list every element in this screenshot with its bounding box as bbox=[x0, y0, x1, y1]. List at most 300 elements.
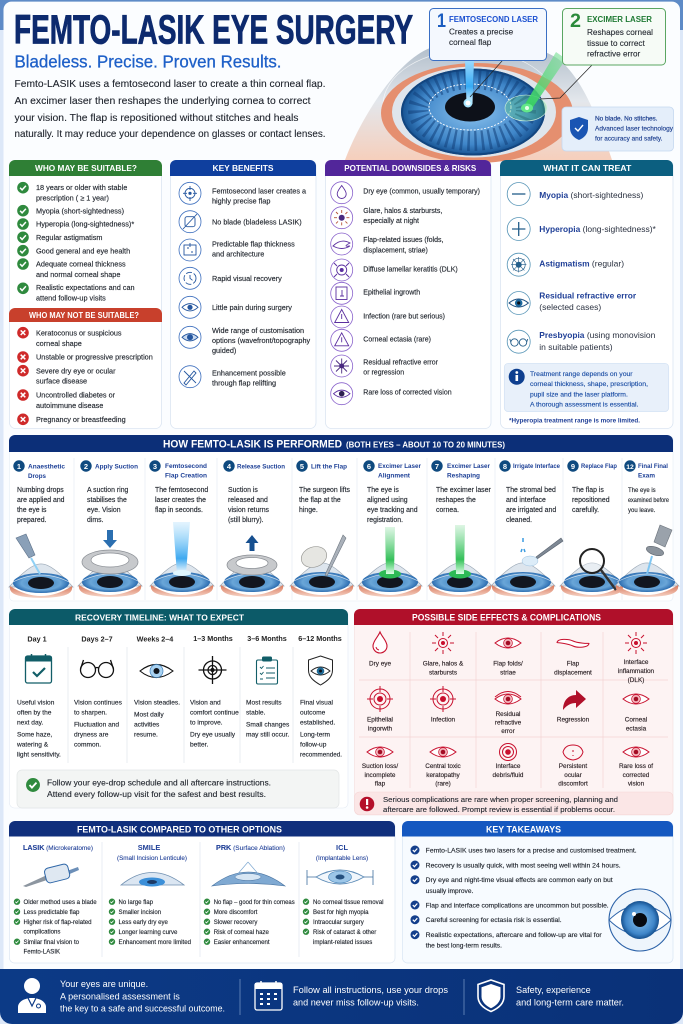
heading: WHAT IT CAN TREAT bbox=[543, 164, 631, 173]
effect: flap displacement: displacement bbox=[554, 670, 592, 676]
list: contraindications: Unstable or progressive prescription bbox=[36, 353, 153, 362]
step 4: release suction: Release Suction bbox=[237, 464, 285, 470]
heading: WHO MAY BE SUITABLE? bbox=[35, 164, 137, 173]
step 6: excimer alignment: eye tracking and bbox=[367, 507, 418, 514]
step 8: irrigate interface: The stromal bed bbox=[506, 487, 556, 494]
heading: FEMTO-LASIK COMPARED TO OTHER OPTIONS bbox=[77, 824, 282, 834]
step 4: release suction: 4 bbox=[227, 462, 232, 471]
icon: calendar bbox=[26, 654, 52, 683]
effect: persistent discomfort: ocular bbox=[564, 772, 583, 779]
risk: glare: especially at night bbox=[363, 218, 419, 225]
effect: interface debris bbox=[493, 744, 524, 779]
6-12 months: outcome bbox=[300, 710, 326, 716]
benefit: customisation: guided) bbox=[212, 346, 236, 355]
step 10: final exam: The eye is bbox=[628, 488, 656, 494]
step 6: excimer alignment: The eye is bbox=[367, 487, 399, 494]
1-3 months: Vision and bbox=[190, 700, 221, 706]
step 1: anaesthetic drops: prepared. bbox=[17, 517, 47, 524]
illustration: flap lift bbox=[290, 535, 354, 597]
1-3 months: Dry eye usually bbox=[190, 732, 236, 738]
days 2-7: Fluctuation and bbox=[74, 722, 119, 728]
risk: dry eye bbox=[331, 182, 480, 204]
effect: persistent discomfort: discomfort bbox=[558, 780, 588, 788]
list: suitability criteria: Good general and eye health bbox=[36, 246, 130, 255]
icon: calendar bbox=[255, 981, 282, 1010]
3-6 months: may still occur. bbox=[246, 732, 289, 738]
illustration: microkeratome bbox=[23, 863, 79, 887]
risk: residual error: Residual refractive error bbox=[363, 359, 439, 366]
3-6 months: stable. bbox=[246, 710, 266, 716]
step 3: femtosecond flap creation: 3 bbox=[153, 462, 157, 471]
subpanel header: who may not be suitable: WHO MAY NOT BE SUITABLE? bbox=[29, 311, 139, 320]
step 7: excimer reshaping: cornea. bbox=[436, 507, 459, 514]
illustration: ring lifted bbox=[220, 535, 284, 597]
treat: residual refractive error bbox=[507, 290, 637, 314]
list: suitability criteria: attend follow-up visits bbox=[36, 294, 106, 303]
benefit: precise flap: highly precise flap bbox=[212, 196, 270, 205]
callout: excimer laser: EXCIMER LASER bbox=[587, 15, 652, 24]
intro paragraph: Femto-LASIK uses a femtosecond laser to create a thin corneal flap. bbox=[14, 78, 326, 90]
risk: loss of vision bbox=[331, 383, 452, 405]
callout: no blade no stitches: for accuracy and safety. bbox=[595, 136, 663, 142]
footer message 3: Safety, experience bbox=[516, 985, 591, 995]
list: contraindications: Severe dry eye or ocular bbox=[36, 366, 116, 375]
step 2: apply suction: eye. Vision bbox=[87, 507, 121, 514]
step 7: excimer reshaping: reshapes the bbox=[436, 497, 476, 504]
option: SMILE: (Small Incision Lenticule) bbox=[117, 855, 187, 862]
subpanel header: who may not be suitable bbox=[9, 308, 162, 322]
risk: flap issues bbox=[331, 233, 443, 255]
heading: POTENTIAL DOWNSIDES & RISKS bbox=[344, 164, 477, 173]
benefit: no blade: No blade (bladeless LASIK) bbox=[212, 217, 302, 226]
step 4: release suction: (still blurry). bbox=[228, 517, 264, 524]
panel: compared to other options bbox=[9, 821, 395, 963]
option: ICL: implant-related issues bbox=[313, 939, 372, 946]
callout: serious complications: Serious complications are rare when proper screening, planning and bbox=[383, 795, 618, 804]
heading: KEY TAKEAWAYS bbox=[486, 824, 561, 834]
callout: aftercare: Follow your eye-drop schedule and all aftercare instructions. bbox=[47, 777, 271, 787]
step 1: anaesthetic drops: 1 bbox=[17, 462, 21, 471]
illustration: microscope bbox=[615, 525, 679, 597]
list: suitability criteria: Myopia (short-sightedness) bbox=[36, 206, 124, 215]
callout: excimer laser: 2 bbox=[570, 11, 581, 32]
days 2-7: to sharpen. bbox=[74, 710, 107, 716]
effect: corneal ectasia: ectasia bbox=[626, 726, 647, 732]
benefit: predictable flap: and architecture bbox=[212, 250, 264, 259]
icon: glasses bbox=[80, 660, 114, 678]
option: SMILE: SMILE bbox=[138, 843, 160, 852]
list: takeaways: Flap and interface complications are uncommon but possible. bbox=[426, 902, 609, 910]
effect: flap folds bbox=[493, 638, 523, 676]
illustration: eye bbox=[609, 889, 671, 951]
option: SMILE: Longer learning curve bbox=[118, 929, 178, 936]
step 7: excimer reshaping bbox=[428, 460, 492, 597]
info box: treatment range bbox=[504, 363, 669, 412]
step 1: anaesthetic drops: are applied and bbox=[17, 497, 65, 504]
step 5: lift the flap: Lift the Flap bbox=[311, 464, 347, 470]
effect: suction loss: Suction loss/ bbox=[362, 763, 398, 770]
panel: key benefits bbox=[170, 160, 316, 428]
effect: interface inflammation: (DLK) bbox=[628, 677, 644, 684]
benefit: customisation bbox=[179, 326, 311, 355]
illustration: blue laser bbox=[150, 522, 214, 597]
step 10: final exam bbox=[615, 460, 679, 597]
list: suitability criteria: prescription ( ≥ 1 year) bbox=[36, 193, 109, 202]
option: ICL: (Implantable Lens) bbox=[316, 855, 368, 862]
risk: residual error bbox=[331, 355, 439, 377]
intro paragraph bbox=[14, 78, 326, 140]
day 1: often by the bbox=[17, 710, 52, 716]
step 9: replace flap: carefully. bbox=[572, 507, 599, 514]
effect: suction loss: flap bbox=[375, 780, 386, 788]
option: PRK: Easier enhancement bbox=[214, 939, 270, 946]
step 4: release suction: Suction is bbox=[228, 487, 258, 494]
risk: DLK: Diffuse lamellar keratitis (DLK) bbox=[363, 267, 458, 274]
effect: flap folds: striae bbox=[500, 670, 516, 676]
step 5: lift the flap bbox=[290, 460, 354, 597]
option: ICL: Risk of cataract & other bbox=[313, 929, 376, 936]
treat: myopia bbox=[507, 182, 643, 206]
6-12 months: Long-term bbox=[300, 732, 331, 738]
effect: rare loss of vision: corrected bbox=[623, 772, 650, 779]
footer message 1: A personalised assessment is bbox=[60, 992, 180, 1002]
step 6: excimer alignment: registration. bbox=[367, 517, 403, 524]
step 3: femtosecond flap creation: laser creates the bbox=[155, 497, 206, 504]
3-6 months bbox=[246, 634, 290, 738]
option: PRK: More discomfort bbox=[214, 909, 258, 916]
effect: interface inflammation bbox=[618, 632, 655, 684]
panel: key takeaways bbox=[402, 821, 673, 963]
callout: excimer laser bbox=[562, 8, 666, 65]
callout: no blade no stitches: No blade. No stitches. bbox=[595, 116, 658, 122]
effect: glare bbox=[423, 632, 464, 676]
benefit: no blade bbox=[179, 211, 302, 233]
risk: flap issues: Flap-related issues (folds, bbox=[363, 237, 443, 244]
callout: femtosecond laser: 1 bbox=[437, 11, 446, 32]
callout: excimer laser: refractive error bbox=[587, 50, 641, 58]
step 4: release suction bbox=[220, 460, 285, 597]
panel: potential downsides and risks bbox=[325, 160, 491, 428]
step 8: irrigate interface: are irrigated and bbox=[506, 507, 556, 514]
option: ICL: Intraocular surgery bbox=[313, 919, 365, 926]
footer message 2: and never miss follow-up visits. bbox=[293, 998, 419, 1008]
benefit: enhancement: Enhancement possible bbox=[212, 369, 286, 378]
footer message 3 bbox=[516, 985, 624, 1008]
illustration: implantable lens bbox=[307, 870, 373, 885]
intro paragraph: naturally. It may reduce your dependence on glasses or contact lenses. bbox=[14, 128, 326, 140]
icon: doctor bbox=[18, 978, 46, 1013]
6-12 months: established. bbox=[300, 720, 335, 726]
list: suitability criteria: Hyperopia (long-sightedness)* bbox=[36, 220, 134, 229]
footer message 1 bbox=[60, 979, 225, 1014]
weeks 2-4: Vision steadies. bbox=[134, 700, 180, 706]
list: takeaways: Careful screening for ectasia risk is essential. bbox=[426, 917, 562, 924]
6-12 months: follow-up bbox=[300, 742, 327, 748]
callout: aftercare bbox=[17, 770, 339, 808]
step 6: excimer alignment: 6 bbox=[367, 462, 371, 471]
step 1: anaesthetic drops: the eye is bbox=[17, 507, 47, 514]
effect: epithelial ingrowth: ingorwth bbox=[368, 726, 393, 732]
callout: aftercare: Attend every follow-up visit for the safest and best results. bbox=[47, 789, 266, 799]
option: PRK: Risk of corneal haze bbox=[214, 929, 270, 936]
risk: epithelial ingrowth bbox=[331, 282, 420, 304]
illustration: eye drops bbox=[9, 534, 73, 598]
panel: how femto-lasik is performed bbox=[9, 435, 679, 601]
effect: dry eye bbox=[369, 632, 391, 668]
step 1: anaesthetic drops: Numbing drops bbox=[17, 487, 64, 494]
step 1: anaesthetic drops bbox=[9, 460, 73, 598]
icon: shield bbox=[478, 980, 504, 1012]
step 6: excimer alignment: aligned using bbox=[367, 497, 408, 504]
panel: who may be suitable bbox=[9, 160, 162, 428]
risk: DLK bbox=[331, 259, 458, 281]
option: PRK: No flap – good for thin corneas bbox=[214, 899, 295, 906]
option: SMILE bbox=[109, 843, 191, 946]
info box: treatment range: A thorough assessment is essential. bbox=[530, 401, 639, 408]
step 4: release suction: vision returns bbox=[228, 507, 270, 514]
list: contraindications: corneal shape bbox=[36, 339, 82, 348]
benefit: little pain bbox=[179, 296, 292, 318]
effect: flap displacement: Flap bbox=[567, 660, 580, 668]
risk: infection: Infection (rare but serious) bbox=[363, 313, 445, 320]
risk: ectasia: Corneal ectasia (rare) bbox=[363, 337, 431, 344]
effect: rare loss of vision: vision bbox=[628, 780, 645, 788]
benefit: customisation: options (wavefront/topography bbox=[212, 336, 311, 345]
treat: presbyopia: Presbyopia (using monovision bbox=[539, 330, 656, 340]
icon: clipboard bbox=[256, 656, 278, 684]
callout: femtosecond laser bbox=[430, 8, 546, 60]
list: takeaways: usually improve. bbox=[426, 888, 474, 895]
list: contraindications: autoimmune disease bbox=[36, 401, 103, 410]
treat: myopia: Myopia (short-sightedness) bbox=[539, 190, 643, 200]
benefit: rapid recovery bbox=[179, 267, 282, 289]
treat: residual refractive error: (selected cases) bbox=[539, 302, 601, 312]
effect: epithelial ingrowth: Epithelial bbox=[367, 716, 393, 724]
risk: infection bbox=[331, 306, 445, 328]
risk: flap issues: displacement, striae) bbox=[363, 247, 428, 254]
risk: glare: Glare, halos & starbursts, bbox=[363, 208, 442, 215]
step 8: irrigate interface bbox=[491, 460, 563, 597]
6-12 months: recommended. bbox=[300, 752, 342, 758]
benefit: enhancement: through flap relifting bbox=[212, 379, 276, 388]
step 3: femtosecond flap creation: Flap Creation bbox=[165, 473, 207, 480]
effect: interface inflammation: Interface bbox=[624, 659, 649, 666]
list: suitability criteria: Realistic expectations and can bbox=[36, 283, 135, 292]
step 5: lift the flap: the flap at the bbox=[299, 497, 341, 504]
step 9: replace flap: Replace Flap bbox=[581, 463, 617, 470]
effect: glare: starbursts bbox=[429, 670, 457, 676]
heading bbox=[163, 438, 505, 450]
step 6: excimer alignment: Excimer Laser bbox=[378, 463, 421, 470]
step 9: replace flap: repositioned bbox=[572, 497, 610, 504]
step 3: femtosecond flap creation: flap in seconds. bbox=[155, 507, 203, 514]
risk: glare bbox=[331, 207, 442, 229]
effect: persistent discomfort: Persistent bbox=[559, 763, 587, 770]
footer message 3: and long-term care matter. bbox=[516, 998, 624, 1008]
step 8: irrigate interface: and interface bbox=[506, 497, 546, 504]
callout: serious complications: aftercare are followed. Prompt review is essential if problems occur. bbox=[383, 805, 615, 814]
callout: femtosecond laser: corneal flap bbox=[449, 38, 492, 47]
treat: astigmatism bbox=[507, 253, 624, 276]
6-12 months: Final visual bbox=[300, 700, 334, 706]
list: contraindications: Pregnancy or breastfeeding bbox=[36, 415, 126, 424]
option: ICL: ICL bbox=[336, 843, 348, 852]
option: LASIK: complications bbox=[24, 929, 60, 936]
illustration: SMILE eye bbox=[121, 872, 184, 886]
effect: residual refractive error: Residual bbox=[496, 711, 520, 718]
effect: infection: Infection bbox=[431, 716, 456, 724]
icon: info bbox=[509, 369, 525, 385]
step 7: excimer reshaping: 7 bbox=[435, 462, 439, 471]
heading: RECOVERY TIMELINE: WHAT TO EXPECT bbox=[75, 612, 245, 622]
effect: flap displacement bbox=[554, 639, 592, 676]
effect: rare loss of vision bbox=[619, 747, 653, 788]
weeks 2-4 bbox=[134, 634, 180, 738]
risk: epithelial ingrowth: Epithelial ingrowth bbox=[363, 289, 420, 296]
benefit: enhancement bbox=[179, 366, 286, 388]
step 10: final exam: Exam bbox=[638, 473, 655, 480]
option: LASIK bbox=[14, 843, 97, 956]
benefit: predictable flap: Predictable flap thickness bbox=[212, 240, 295, 249]
treat: presbyopia: in suitable patients) bbox=[539, 342, 613, 352]
step 3: femtosecond flap creation: Femtosecond bbox=[165, 463, 207, 470]
panel: possible side effects and complications bbox=[354, 609, 673, 815]
risk: residual error: or regression bbox=[363, 370, 404, 377]
3-6 months: Most results bbox=[246, 700, 282, 706]
list: suitability criteria bbox=[17, 182, 135, 303]
1-3 months: to improve. bbox=[190, 720, 223, 726]
effect: regression bbox=[557, 690, 590, 724]
illustration: green beam reshaping bbox=[428, 525, 492, 597]
illustration: irrigation bbox=[491, 538, 563, 597]
option: ICL: Best for high myopia bbox=[313, 909, 369, 916]
treat: astigmatism: Astigmatism (regular) bbox=[539, 258, 624, 268]
treat: residual refractive error: Residual refractive error bbox=[539, 290, 637, 300]
footer message 1: Your eyes are unique. bbox=[60, 979, 148, 989]
step 5: lift the flap: The surgeon lifts bbox=[299, 487, 350, 494]
days 2-7: Vision continues bbox=[74, 700, 123, 706]
icon: warning bbox=[360, 797, 374, 811]
step 5: lift the flap: 5 bbox=[300, 462, 304, 471]
step 2: apply suction: stabilises the bbox=[87, 497, 127, 504]
risk: loss of vision: Rare loss of corrected vision bbox=[363, 390, 452, 397]
step 5: lift the flap: hinge. bbox=[299, 507, 318, 514]
weeks 2-4: activities bbox=[134, 722, 160, 728]
weeks 2-4: resume. bbox=[134, 732, 158, 738]
step 2: apply suction: A suction ring bbox=[87, 487, 129, 494]
option: SMILE: Less early dry eye bbox=[118, 919, 169, 926]
option: SMILE: No large flap bbox=[118, 899, 154, 906]
list: contraindications: surface disease bbox=[36, 377, 87, 386]
effect: central toxic keratopathy bbox=[425, 747, 462, 788]
benefit: predictable flap bbox=[179, 239, 295, 261]
benefit: little pain: Little pain during surgery bbox=[212, 303, 292, 312]
callout: excimer laser: tissue to correct bbox=[587, 39, 646, 48]
panel: what it can treat bbox=[500, 160, 673, 428]
option: ICL: No corneal tissue removal bbox=[313, 899, 383, 906]
3-6 months: 3–6 Months bbox=[247, 634, 287, 643]
days 2-7: dryness are bbox=[74, 732, 109, 738]
list: contraindications: Uncontrolled diabetes or bbox=[36, 391, 116, 400]
effect: regression: Regression bbox=[557, 716, 590, 724]
step 2: apply suction: 2 bbox=[84, 462, 88, 471]
step 10: final exam: examined before bbox=[628, 498, 670, 504]
option: LASIK: LASIK (Microkeratome) bbox=[23, 843, 93, 852]
title: FEMTO-LASIK EYE SURGERY bbox=[14, 6, 413, 52]
days 2-7: common. bbox=[74, 742, 101, 748]
hero illustration: eye with laser beams bbox=[345, 43, 612, 163]
effect: interface inflammation: inflammation bbox=[618, 668, 655, 675]
option: LASIK: Similar final vision to bbox=[24, 939, 80, 946]
day 1 bbox=[16, 634, 61, 758]
3-6 months: Small changes bbox=[246, 722, 290, 728]
effect: persistent discomfort bbox=[558, 745, 588, 788]
weeks 2-4: Weeks 2–4 bbox=[137, 634, 173, 644]
list: takeaways: Realistic expectations, aftercare and follow-up are vital for bbox=[426, 932, 603, 939]
benefit: precise flap bbox=[179, 182, 307, 205]
risk: ectasia bbox=[331, 329, 431, 351]
step 3: femtosecond flap creation bbox=[149, 460, 214, 597]
footer message 2 bbox=[293, 985, 448, 1008]
list: takeaways: Recovery is usually quick, with most seeing well within 24 hours. bbox=[426, 862, 621, 870]
1-3 months: better. bbox=[190, 742, 208, 748]
effect: infection bbox=[430, 686, 456, 724]
intro paragraph: your vision. The flap is repositioned without stitches and heals bbox=[14, 112, 298, 124]
illustration: suction ring bbox=[78, 530, 142, 597]
option: ICL bbox=[303, 843, 383, 946]
icon: eye bbox=[140, 664, 173, 678]
icon: target bbox=[198, 656, 226, 684]
list: takeaways bbox=[410, 846, 637, 950]
effect: central toxic keratopathy: (rare) bbox=[435, 780, 451, 788]
step 1: anaesthetic drops: Drops bbox=[28, 473, 46, 480]
6-12 months bbox=[298, 634, 342, 758]
footer band bbox=[0, 969, 683, 1024]
list: takeaways: Dry eye and night-time visual effects are common early on but bbox=[426, 877, 613, 884]
step 7: excimer reshaping: The excimer laser bbox=[436, 487, 491, 494]
option: SMILE: Enhancement more limited bbox=[118, 939, 191, 946]
weeks 2-4: Most daily bbox=[134, 712, 164, 718]
list: takeaways: Femto-LASIK uses two lasers for a precise and customised treatment. bbox=[426, 848, 637, 854]
effect: central toxic keratopathy: Central toxic bbox=[425, 763, 462, 770]
day 1: Some haze, bbox=[17, 732, 52, 738]
callout: excimer laser: Reshapes corneal bbox=[587, 28, 653, 37]
effect: suction loss: incomplete bbox=[365, 772, 396, 779]
step 8: irrigate interface: Irrigate Interface bbox=[513, 463, 560, 470]
effect: residual refractive error: error bbox=[501, 728, 516, 735]
benefit: customisation: Wide range of customisation bbox=[212, 326, 304, 335]
step 2: apply suction: dims. bbox=[87, 517, 104, 524]
effect: dry eye: Dry eye bbox=[369, 660, 391, 668]
effect: corneal ectasia bbox=[623, 694, 649, 732]
step 2: apply suction: Apply Suction bbox=[95, 464, 138, 470]
effect: central toxic keratopathy: keratopathy bbox=[426, 772, 460, 779]
step 10: final exam: Final Final bbox=[638, 463, 668, 470]
step 6: excimer alignment bbox=[358, 460, 422, 597]
option: LASIK: Less predictable flap bbox=[24, 909, 80, 916]
option: LASIK: Higher risk of flap-related bbox=[24, 919, 92, 926]
subtitle: Bladeless. Precise. Proven Results. bbox=[14, 52, 282, 72]
list: contraindications: Keratoconus or suspicious bbox=[36, 328, 122, 337]
step 10: final exam: 12 bbox=[626, 464, 634, 471]
step 10: final exam: you leave. bbox=[628, 508, 656, 514]
1-3 months: comfort continue bbox=[190, 710, 239, 716]
illustration: magnifier bbox=[560, 549, 624, 597]
effect: flap folds: Flap folds/ bbox=[493, 660, 523, 668]
step 7: excimer reshaping: Excimer Laser bbox=[447, 463, 490, 470]
heading: (BOTH EYES – ABOUT 10 TO 20 MINUTES) bbox=[346, 440, 505, 450]
footnote: *Hyperopia treatment range is more limited. bbox=[509, 418, 640, 424]
